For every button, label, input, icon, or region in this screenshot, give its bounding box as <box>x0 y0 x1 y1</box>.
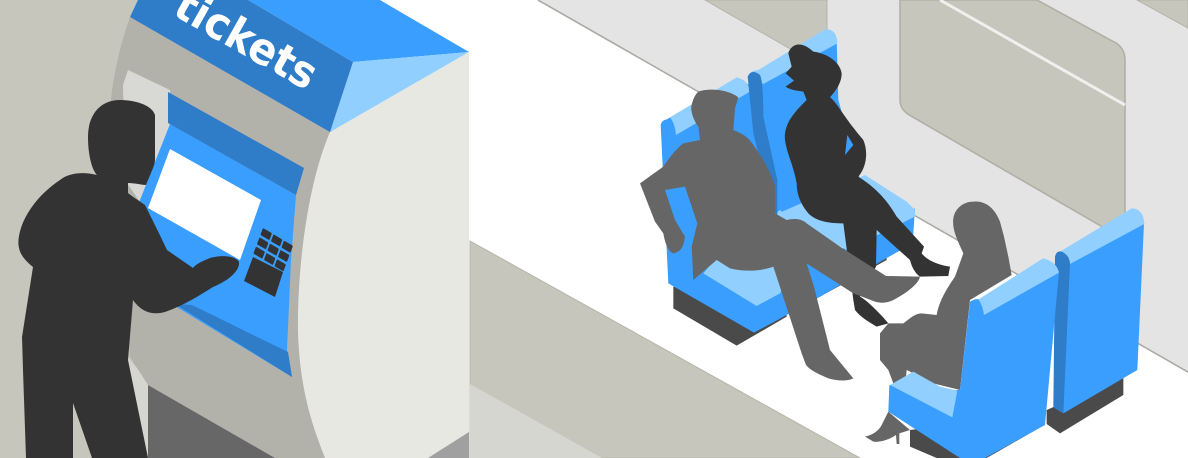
silhouette: man at machine <box>18 100 239 458</box>
ticket machine <box>110 0 469 458</box>
seat 3 cushion <box>890 372 957 417</box>
seat 3 base <box>910 413 1036 458</box>
seat 2 cushion <box>778 175 915 250</box>
machine base <box>148 385 275 458</box>
card slot panel <box>244 257 283 297</box>
passenger foot and heel <box>865 412 910 444</box>
seat 2 cushion front <box>787 208 915 297</box>
seat 4 headrest <box>1060 208 1144 264</box>
seat group and passenger, front <box>865 201 1144 458</box>
seat 2 back <box>752 40 860 220</box>
screen surround <box>138 124 296 377</box>
surround bottom band <box>175 304 292 377</box>
canopy underside <box>330 52 469 132</box>
seat 1 back and body <box>661 78 830 333</box>
seat 3 headrest <box>978 258 1059 315</box>
seat group and passengers, rear <box>640 29 950 380</box>
inner recess panel <box>123 70 170 205</box>
panel: carriage wall <box>538 0 1188 372</box>
window: carriage window with divider <box>900 0 1125 240</box>
seat 1 cushion <box>703 210 807 306</box>
side plinth <box>428 432 469 458</box>
sign band <box>130 0 353 132</box>
machine side <box>298 52 469 458</box>
gap at woman's hand <box>845 135 853 155</box>
display screen <box>148 149 261 260</box>
machine front <box>110 17 345 458</box>
seat 2 headrest <box>748 29 837 84</box>
seat 4 back <box>1063 209 1144 413</box>
seat 2 side strip <box>748 72 777 217</box>
seat 2 base <box>820 253 887 297</box>
keypad <box>253 228 293 271</box>
seat 3 body <box>888 258 1059 458</box>
seat 1 base <box>673 287 787 346</box>
passenger: woman seated <box>880 201 1012 390</box>
surround top band <box>168 92 304 195</box>
passenger: man <box>640 90 920 380</box>
seat 4 side strip <box>1053 251 1070 413</box>
canopy top <box>248 0 469 62</box>
seat 4 base <box>1047 377 1123 433</box>
passenger: woman <box>785 45 950 327</box>
seat 1 headrest <box>670 77 750 135</box>
